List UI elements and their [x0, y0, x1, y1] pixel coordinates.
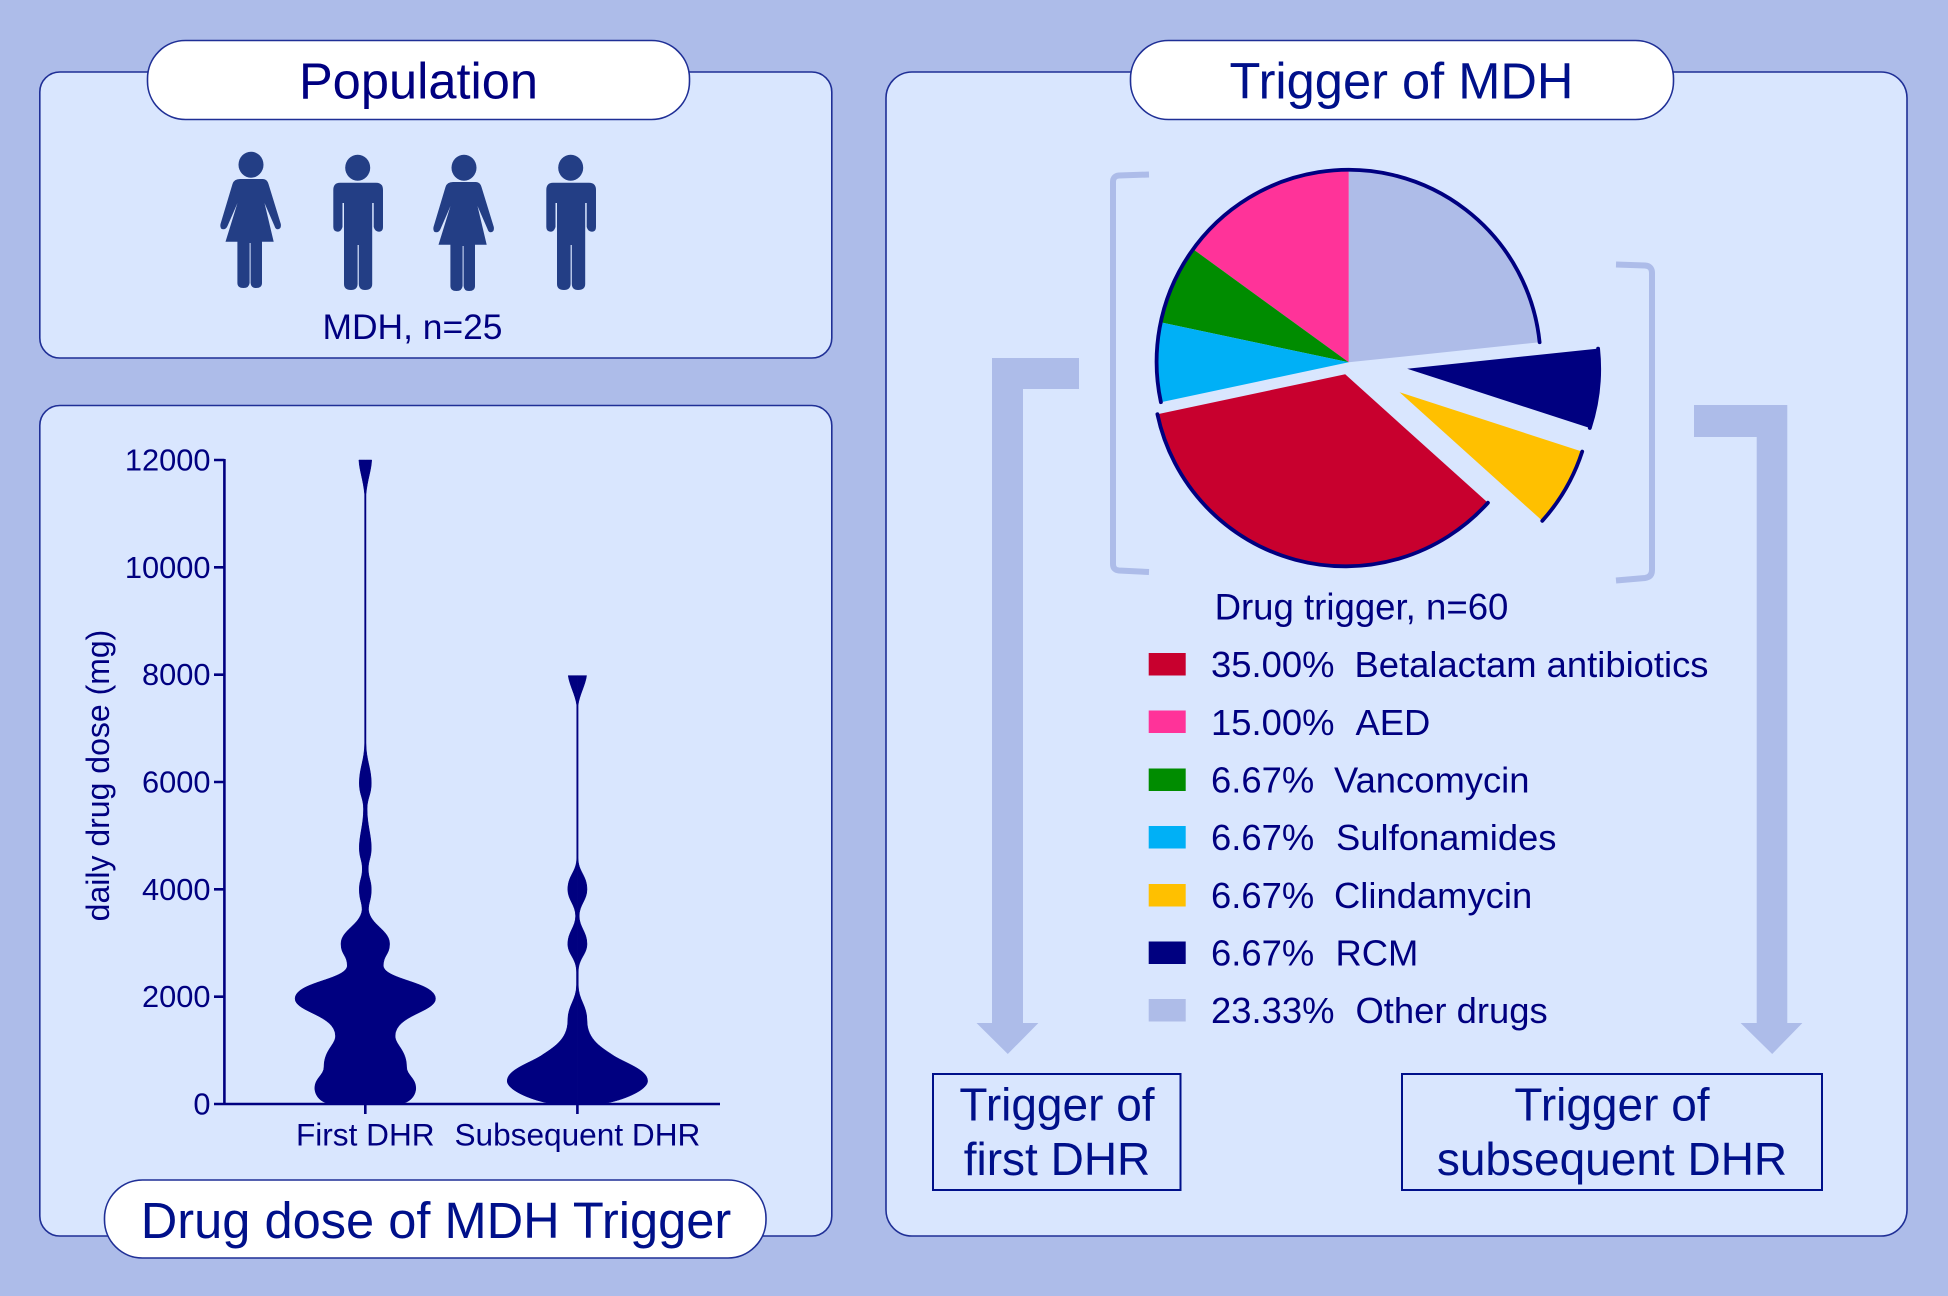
- violin: subsequent DHR: [507, 676, 648, 1104]
- legend row: AED: [1149, 702, 1430, 743]
- slice: clindamycin: [1400, 392, 1582, 521]
- icon: woman: [220, 152, 281, 288]
- icon: man: [546, 155, 596, 290]
- y tick labels: [125, 442, 210, 1122]
- slice: betalactam antibiotics: [1157, 374, 1488, 566]
- pie caption: Drug trigger, n=60: [1215, 587, 1508, 628]
- outline: upper arc: [1157, 170, 1540, 402]
- heading: trigger of MDH: Trigger of MDH: [1230, 53, 1573, 110]
- box: trigger of subsequent DHR: [1402, 1074, 1822, 1190]
- y tick labels: 6000: [142, 764, 210, 800]
- pie chart: [1157, 170, 1599, 566]
- population count: MDH, n=25: [323, 307, 502, 347]
- heading: Population: [148, 40, 690, 120]
- y tick labels: 8000: [142, 657, 210, 692]
- y tick labels: 10000: [125, 550, 210, 585]
- arrow: to first DHR: [976, 358, 1079, 1054]
- box: trigger of subsequent DHR: subsequent DHR: [1437, 1133, 1787, 1185]
- legend row: sulfonamides: [1149, 817, 1556, 858]
- y tick labels: 4000: [142, 872, 210, 907]
- icon: four people: [220, 152, 596, 291]
- violin chart: [80, 442, 720, 1153]
- legend row: RCM: [1149, 932, 1418, 974]
- slice: other drugs: [1349, 170, 1540, 362]
- panel: population: [40, 40, 832, 358]
- legend row: RCM: RCM: [1336, 932, 1418, 974]
- y tick labels: 12000: [125, 442, 210, 478]
- legend row: vancomycin: Vancomycin: [1334, 760, 1530, 800]
- panel: trigger of MDH: [886, 40, 1907, 1236]
- slice: sulfonamides: [1157, 322, 1349, 402]
- heading: trigger of MDH: [1130, 40, 1674, 120]
- legend row: vancomycin: [1149, 760, 1530, 800]
- legend row: clindamycin: Clindamycin: [1334, 875, 1532, 916]
- icon: man: [333, 155, 383, 290]
- y axis label: daily drug dose (mg): [80, 630, 116, 921]
- legend row: RCM: 6.67%: [1211, 932, 1314, 974]
- heading: Population: Population: [299, 53, 538, 110]
- box: trigger of first DHR: Trigger of: [959, 1078, 1155, 1130]
- slice: RCM: [1407, 349, 1599, 428]
- box: trigger of first DHR: first DHR: [964, 1133, 1150, 1185]
- bracket: right: [1616, 264, 1652, 580]
- legend row: AED: 15.00%: [1211, 702, 1334, 743]
- legend row: other drugs: Other drugs: [1356, 990, 1548, 1031]
- legend row: sulfonamides: Sulfonamides: [1336, 817, 1556, 858]
- legend row: betalactam: [1149, 644, 1708, 685]
- legend row: other drugs: [1149, 990, 1548, 1031]
- legend row: vancomycin: 6.67%: [1211, 760, 1314, 800]
- y axis: [214, 459, 720, 1114]
- violin: first DHR: [295, 460, 436, 1104]
- heading: drug dose of MDH trigger: [104, 1180, 766, 1258]
- bracket: left: [1113, 174, 1149, 572]
- y tick labels: 2000: [142, 979, 210, 1014]
- slice: AED: [1193, 170, 1349, 362]
- x tick labels: First DHR: [296, 1117, 435, 1153]
- legend row: betalactam: Betalactam antibiotics: [1354, 644, 1708, 685]
- legend row: clindamycin: [1149, 875, 1532, 916]
- panel: drug dose: [40, 406, 832, 1258]
- legend row: clindamycin: 6.67%: [1211, 875, 1314, 916]
- legend row: AED: AED: [1356, 702, 1430, 743]
- x tick labels: Subsequent DHR: [454, 1117, 700, 1153]
- legend row: betalactam: 35.00%: [1211, 644, 1334, 685]
- y tick labels: 0: [193, 1086, 210, 1122]
- arrow: to subsequent DHR: [1694, 405, 1802, 1054]
- heading: drug dose of MDH trigger: Drug dose of MDH Trigger: [141, 1192, 731, 1249]
- legend: [1149, 644, 1708, 1031]
- box: trigger of subsequent DHR: Trigger of: [1514, 1078, 1710, 1130]
- icon: woman: [433, 155, 494, 291]
- slice: vancomycin: [1161, 249, 1349, 362]
- box: trigger of first DHR: [933, 1074, 1180, 1190]
- legend row: other drugs: 23.33%: [1211, 990, 1334, 1031]
- legend row: sulfonamides: 6.67%: [1211, 817, 1314, 858]
- x tick labels: [296, 1117, 700, 1153]
